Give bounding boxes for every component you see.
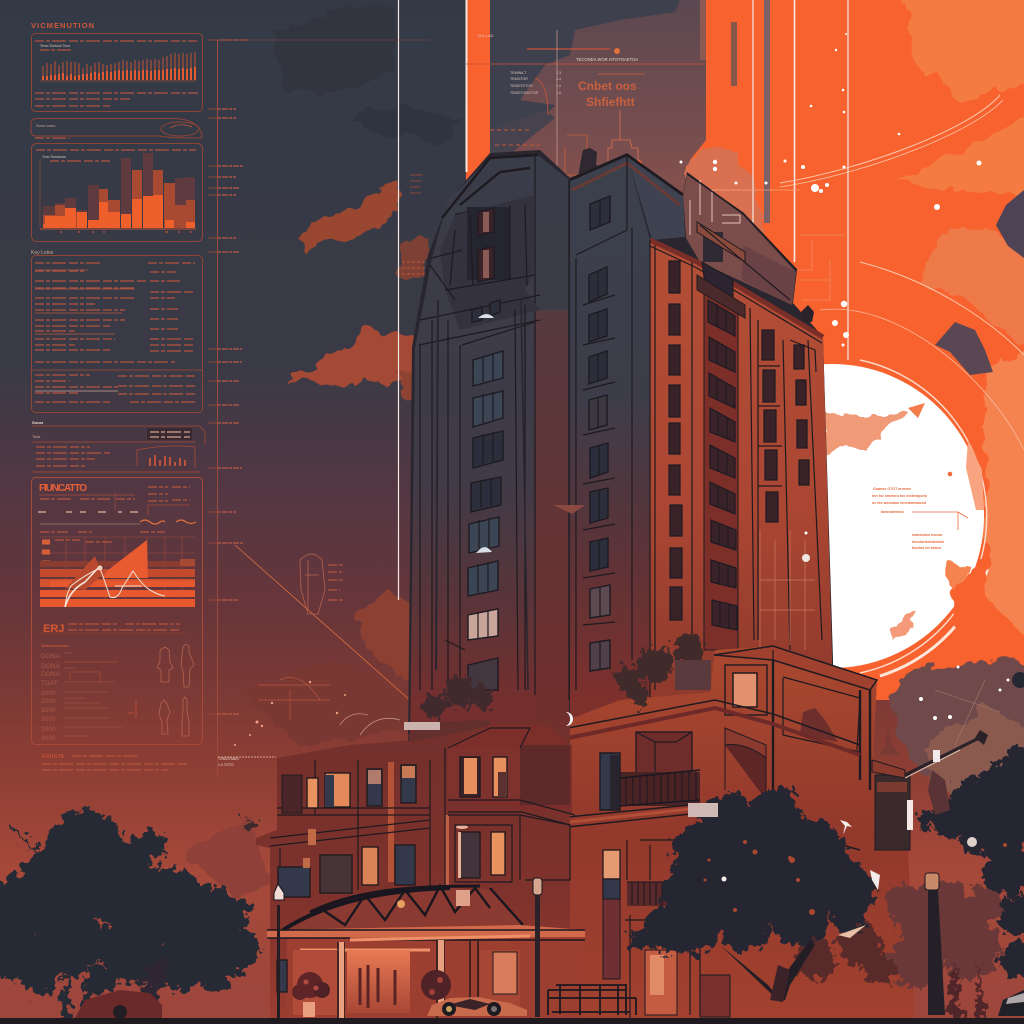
building: tower xyxy=(408,150,833,745)
text on sun: nc teo worzatoo tenelarmiatoed xyxy=(872,501,926,505)
schematic labels on dark cloud: TEMOTOTOR xyxy=(510,84,533,88)
trunk xyxy=(720,940,815,1002)
grid xyxy=(40,537,195,607)
panel: line and stripe chart: 3000 xyxy=(41,690,56,697)
balcony xyxy=(620,770,700,806)
ground-level openings xyxy=(645,950,677,1015)
panel: mini summary: Tolar xyxy=(32,434,41,439)
text on sun: Guanos OTOT arnenie xyxy=(873,487,911,491)
light glints xyxy=(478,314,494,318)
birds xyxy=(840,820,852,835)
heading: top left: VICMENUTION xyxy=(31,21,94,30)
bright bars xyxy=(43,195,195,228)
middle column windows xyxy=(553,196,632,690)
blotches on sun xyxy=(822,410,990,640)
chart bars bright xyxy=(43,67,195,80)
lower balcony xyxy=(627,882,677,905)
panel: mini summary xyxy=(32,420,205,472)
brown cloud upper middle xyxy=(490,0,706,225)
planter left xyxy=(292,972,330,1017)
parked car left xyxy=(75,990,162,1019)
bay projection xyxy=(450,725,572,815)
pavilion panel shadow xyxy=(800,708,838,742)
panel: line and stripe chart: DONA xyxy=(41,653,60,660)
text on sun xyxy=(872,487,945,550)
moon glint xyxy=(566,712,573,726)
panel: line and stripe chart: DONA xyxy=(41,663,60,670)
tall window xyxy=(600,753,620,810)
schematic labels on dark cloud: tomatine xyxy=(410,173,423,177)
diagonal line and schematics xyxy=(218,545,412,757)
dim bars xyxy=(43,153,195,228)
panel: table list xyxy=(31,250,202,412)
panel: bar chart 1: Temo Tontomi Tono xyxy=(40,44,70,48)
large schematic text: Shfiefhtt xyxy=(586,95,635,109)
panel: line and stripe chart: 3000 xyxy=(41,698,56,705)
panel: bar chart 2: Tono Tonotomo xyxy=(42,155,66,159)
cornice lines xyxy=(570,155,683,195)
schematic labels on dark cloud: 1.6 xyxy=(556,91,561,95)
upper floor windows xyxy=(282,757,507,813)
orange sky on right xyxy=(466,0,1024,700)
left tree xyxy=(0,810,259,1018)
mid bars xyxy=(43,170,195,228)
panel: bar chart 1 xyxy=(32,34,202,112)
logo text and caption: ERJ xyxy=(43,623,64,635)
canopy band xyxy=(267,925,585,938)
balcony light xyxy=(688,803,718,817)
schematic labels on dark cloud: 1.0 xyxy=(556,84,561,88)
schematic labels on dark cloud: TAZ-LAD xyxy=(477,33,493,38)
schematic labels on dark cloud: tomeno xyxy=(410,179,422,183)
text block below panel xyxy=(42,754,188,770)
end pilaster xyxy=(308,829,316,845)
terrace foliage xyxy=(616,634,706,705)
text on sun: tmotno tor tottoo xyxy=(912,546,942,550)
trunk xyxy=(60,960,95,1018)
lit window xyxy=(733,673,757,707)
chart bars dim xyxy=(43,52,195,80)
left wing face xyxy=(410,155,569,745)
arcs and dots on orange sky xyxy=(680,33,1024,450)
panel: bar chart 2 xyxy=(32,144,202,242)
arm and pole right xyxy=(880,725,988,815)
schematic labels on dark cloud: tonate xyxy=(410,185,420,189)
right face louvre column xyxy=(697,262,745,650)
door xyxy=(277,960,287,992)
list: Tomonotomon xyxy=(41,643,69,648)
arch bracket xyxy=(725,728,766,758)
text on sun: tonotortonnalotmo xyxy=(912,540,945,544)
lower floor windows xyxy=(278,815,570,897)
lamp center xyxy=(533,878,542,1017)
caption lines xyxy=(35,92,198,94)
text on sun: mamiotom tnonor xyxy=(912,533,943,537)
light clouds xyxy=(892,0,1024,650)
panel: small pill: Sono tomo xyxy=(36,123,56,128)
triangles xyxy=(102,540,148,578)
axis rail with tick labels xyxy=(208,40,430,778)
building: right pavilion xyxy=(568,634,915,1018)
left wing windows xyxy=(468,351,503,690)
pale cloud by building xyxy=(683,150,770,245)
schematic labels on dark cloud: TEMOTOR xyxy=(510,77,528,81)
figure outlines xyxy=(157,644,194,736)
panel: line and stripe chart: 3000 xyxy=(41,726,56,733)
brown tree lower right xyxy=(795,882,1003,1018)
sun ring arcs xyxy=(860,360,987,673)
schematic labels on dark cloud xyxy=(402,30,705,274)
thin white vertical lines xyxy=(398,0,848,600)
truss xyxy=(320,886,523,925)
axis rail with tick labels: TOMOTAMO xyxy=(218,757,239,761)
car xyxy=(427,997,527,1016)
floor ledge xyxy=(568,804,860,850)
schematic labels on dark cloud: tomoto xyxy=(410,191,421,195)
ornate crown xyxy=(440,195,540,330)
right face column 3 windows xyxy=(750,308,790,650)
leaf gaps xyxy=(1003,843,1007,847)
sky clouds on left xyxy=(180,0,462,900)
panel: table list: Key Lotes xyxy=(31,250,54,256)
right face column 4 windows xyxy=(790,340,822,640)
grey-brown cloud behind right trees xyxy=(888,658,1024,810)
panel: line and stripe chart: DONA xyxy=(41,671,60,678)
panel: line and stripe chart xyxy=(32,478,202,744)
panel: mini summary: Sonar xyxy=(32,420,44,425)
slate cloud top xyxy=(490,0,680,135)
right end bay xyxy=(875,775,910,850)
right face xyxy=(650,240,832,700)
dim band xyxy=(40,561,195,567)
roof terrace xyxy=(408,720,490,742)
lit tall window xyxy=(603,850,620,879)
ornate crown windows xyxy=(478,208,494,236)
orange stripes xyxy=(40,569,195,577)
schematic labels on dark cloud: 1.4 xyxy=(556,77,561,81)
schematic labels on dark cloud: TEMOTONOTOR xyxy=(510,91,539,95)
panel: line and stripe chart: TOAT xyxy=(41,680,58,687)
back roof xyxy=(683,174,796,305)
patio furniture xyxy=(548,985,636,1015)
text on sun: terr tor ometeru toc inotemporio xyxy=(872,494,928,498)
canopy entrance xyxy=(267,878,636,1020)
white trend line xyxy=(65,568,165,607)
silhouette xyxy=(408,150,833,745)
middle face xyxy=(570,155,650,740)
recess xyxy=(636,732,692,777)
panel: line and stripe chart: 3000 xyxy=(41,716,56,723)
leaf gaps xyxy=(658,840,815,950)
right tree xyxy=(917,672,1024,978)
panel: small pill xyxy=(31,118,202,138)
right face column 1 windows xyxy=(655,245,692,690)
upper roof lines xyxy=(714,646,877,690)
schematic labels on dark cloud: 1.3 xyxy=(556,71,561,75)
center tree xyxy=(630,786,880,1002)
schematic labels on dark cloud: TECONDA WOR AITOTOAETOA xyxy=(576,57,638,62)
parked car right xyxy=(998,990,1024,1016)
interior figures xyxy=(360,965,395,1008)
sun disc xyxy=(680,360,990,676)
lamp left xyxy=(274,884,284,1020)
interior glow xyxy=(347,950,410,1013)
planter center xyxy=(421,970,451,1000)
schematic labels on dark cloud: TEMINA T xyxy=(510,71,527,75)
columns xyxy=(338,940,478,1018)
panel: line and stripe chart: 3000 xyxy=(41,707,56,714)
brown pier xyxy=(535,310,568,740)
large schematic text xyxy=(578,79,637,109)
dark cloud blobs xyxy=(996,190,1024,258)
heading: FIUNCATTO xyxy=(39,483,87,494)
panel: line and stripe chart: 3000 xyxy=(41,735,56,742)
ledge xyxy=(568,700,860,745)
facade scratch lines xyxy=(760,530,815,650)
pilasters xyxy=(420,305,535,695)
icon: rooftop statue xyxy=(578,148,607,178)
text block below panel: ERHNTA xyxy=(42,754,65,760)
large schematic text: Cnbet oos xyxy=(578,79,637,93)
ground strip xyxy=(0,1018,1024,1024)
floor ledges xyxy=(270,748,445,895)
building: left wing xyxy=(256,676,575,1018)
bright pilasters xyxy=(388,762,394,882)
axis rail with tick labels: 1.0 TOTO xyxy=(218,763,234,767)
text on sun: tamnotemoto xyxy=(881,510,905,514)
street lamp right xyxy=(925,873,945,1015)
